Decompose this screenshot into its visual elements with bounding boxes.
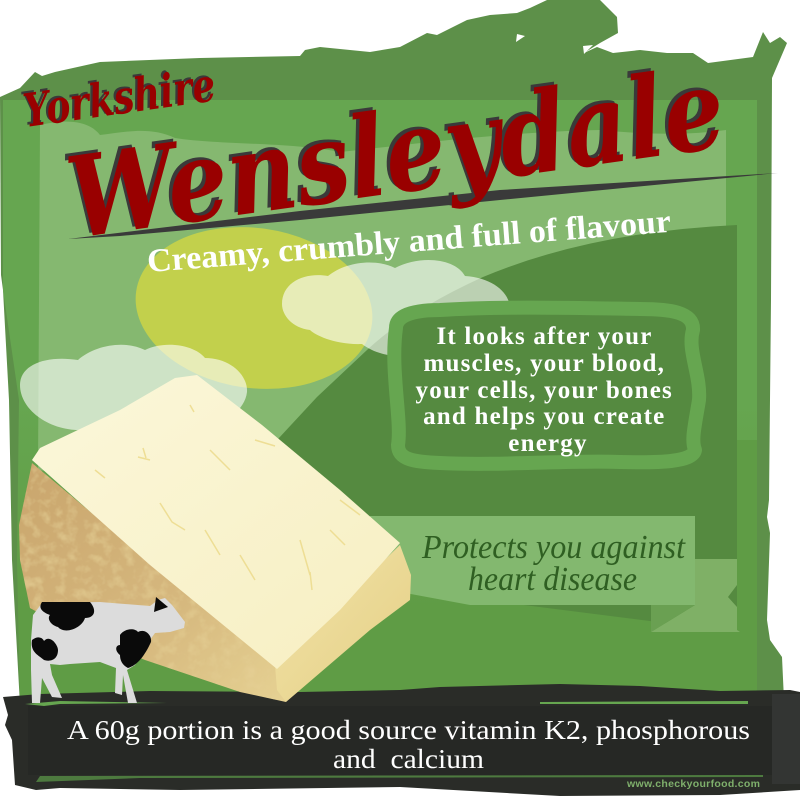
callout text: energy [508,430,588,457]
nutrition text: A 60g portion is a good source vitamin K2, phosphorous [67,715,750,745]
website credit: www.checkyourfood.com [626,778,760,790]
title: Yorkshire: Yorkshire [20,58,219,138]
sun [136,227,372,389]
cheese top face [32,375,400,669]
cheese wedge [19,375,411,702]
dark green hillside [240,225,737,632]
subtitle: Creamy, crumbly and full of flavour [146,204,672,280]
callout text: It looks after your [436,323,652,350]
cheese end face [275,545,411,702]
title: Yorkshire: Yorkshire [18,56,216,136]
icon: cow [31,597,185,703]
nutrition text: and calcium [333,744,484,774]
ribbon text: Protects you against [421,529,686,566]
cloud: upper right [282,260,510,357]
ribbon text: heart disease [468,561,637,598]
callout frame: health benefits [394,308,699,464]
ribbon banner [370,516,740,632]
cheese texture [95,405,360,590]
cloud: lower left [20,345,247,437]
cheese side face [19,463,286,702]
callout text: muscles, your blood, [423,350,665,377]
callout text: your cells, your bones [416,377,673,404]
title shadow and underline stroke [68,173,778,239]
callout text: and helps you create [423,403,665,430]
